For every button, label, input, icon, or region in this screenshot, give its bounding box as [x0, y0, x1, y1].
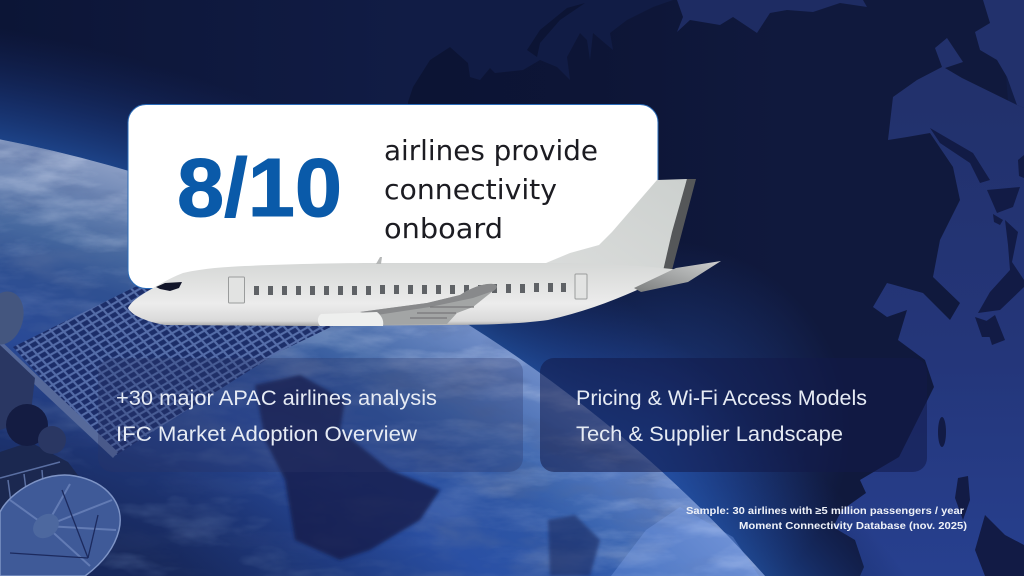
text: +30 major APAC airlines analysis: +30 major APAC airlines analysis	[116, 387, 437, 410]
text: Tech and Supplier Landscape: Tech & Supplier Landscape	[576, 423, 843, 446]
world map: dark landmass and seas	[408, 0, 1024, 576]
atmosphere glow: lit right limb	[470, 240, 850, 576]
satellite	[0, 282, 335, 576]
panel: right topics	[540, 358, 927, 472]
map: light sea on globe	[611, 507, 759, 576]
card text: airlines provide connectivity onboard: connectivity	[384, 173, 557, 206]
map overlay on globe	[255, 375, 759, 576]
text: Pricing and Wi-Fi Access Models: Pricing & Wi-Fi Access Models	[576, 387, 867, 410]
plane: front door	[228, 277, 244, 303]
plane: cockpit window	[156, 282, 182, 291]
card text: airlines provide connectivity onboard: onboard	[384, 212, 503, 245]
footnote: sample and source	[686, 506, 967, 532]
earth globe	[0, 139, 765, 576]
plane: fuselage	[128, 263, 680, 326]
plane: fin trailing edge	[663, 179, 696, 271]
footnote: sample and source: Sample: 30 airlines with ≥5 million passengers / year	[686, 506, 964, 517]
plane: wing	[360, 284, 497, 325]
card text: airlines provide connectivity onboard: airlines provide	[384, 134, 598, 167]
map: Eurasia landmass	[408, 0, 1024, 576]
card text: airlines provide connectivity onboard	[384, 134, 598, 245]
plane: engine	[318, 312, 383, 326]
panel: left topics	[98, 358, 523, 472]
map: northern sea	[677, 0, 867, 33]
satellite: boom arm	[0, 340, 118, 458]
map: Sakhalin and Japan	[930, 128, 1024, 576]
satellite: upper dish	[0, 287, 29, 349]
map: Pacific and Asian seas	[833, 38, 1024, 576]
text: IFC Market Adoption Overview: IFC Market Adoption Overview	[116, 423, 418, 446]
map: Novaya Zemlya	[527, 3, 585, 57]
plane: tail fin	[546, 179, 687, 272]
plane: horizontal stabilizer	[634, 261, 721, 292]
footnote: sample and source: Moment Connectivity Database (nov. 2025)	[739, 521, 967, 532]
satellite: solar panels	[13, 282, 335, 457]
big number: 8/10: 8/10	[177, 141, 342, 234]
map: African landmass on globe	[255, 375, 440, 560]
callout card: 8/10 airlines	[128, 104, 658, 288]
satellite: body	[0, 345, 80, 530]
plane: windows	[254, 283, 566, 295]
map: Indian landmass on globe	[548, 515, 600, 576]
map: South-East Asia islands	[938, 417, 946, 447]
plane: rear door	[575, 274, 587, 299]
plane: antenna	[376, 257, 382, 264]
airplane	[128, 179, 721, 326]
map: Bering sea	[975, 0, 1024, 108]
satellite: dish	[0, 475, 120, 576]
